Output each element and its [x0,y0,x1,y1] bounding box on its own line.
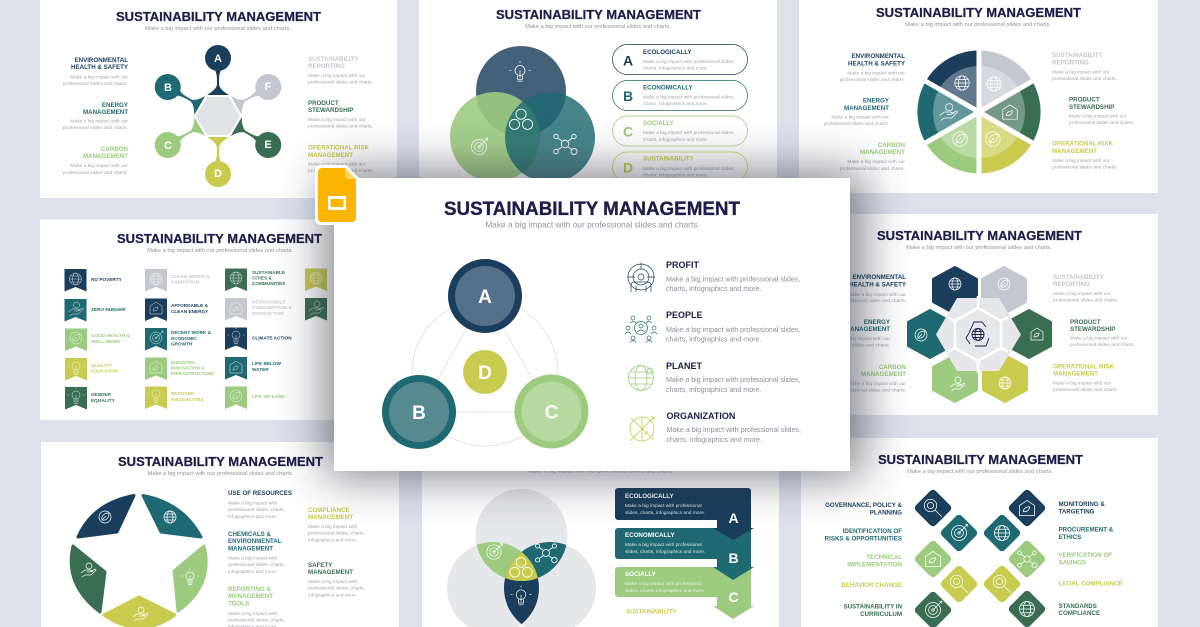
left labels: Make a big impact with our [847,159,905,165]
right labels: MANAGEMENT [1053,370,1098,378]
panel: star slide [41,442,399,627]
left labels: ENVIRONMENTAL [74,57,128,64]
labels: Make a big impact with [308,524,358,530]
labels: professional slides, charts, [228,507,285,513]
banner labels: CONSUMPTION & [252,305,292,310]
text: profit: Make a big impact with professional slides, [666,276,800,284]
banner labels: PRODUCTION [252,311,284,316]
text: planet: Make a big impact with professional slides, [666,376,800,384]
node A [448,259,522,333]
panel: pie slide [799,0,1158,193]
node C: C [545,402,559,424]
arrow: B [615,528,754,580]
labels: Make a big impact with [228,611,278,617]
subtitle: Make a big impact with our professional slides and charts. [905,22,1051,28]
banner labels: QUALITY [91,363,112,368]
labels [228,490,365,627]
option pills [612,44,748,182]
pill text: Make a big impact with professional slides, [643,130,735,136]
heading: SUSTAINABILITY MANAGEMENT [117,231,322,246]
banner labels: AFFORDABLE & [171,303,209,308]
right labels: VERIFICATION OF [1058,552,1112,559]
left labels: Make a big impact with our [848,292,906,298]
center card shadow [326,172,862,476]
left labels: Make a big impact with our [847,70,905,76]
right labels: OPERATIONAL RISK [1052,140,1113,148]
hub diagram: D [214,168,222,180]
labels: MANAGEMENT [308,569,353,576]
heading: SUSTAINABILITY MANAGEMENT [876,5,1081,20]
banner labels: LIFE BELOW [252,361,281,366]
text: organization: Make a big impact with professional slides, [666,426,801,434]
node D [463,350,507,394]
right labels: STEWARDSHIP [308,107,353,114]
right labels: STEWARDSHIP [1069,104,1114,111]
arrow text: ECOLOGICALLY [625,493,674,500]
left labels: professional slides and charts. [63,170,128,176]
labels: MANAGEMENT [228,546,273,552]
banner labels: DECENT WORK & [171,330,212,335]
right labels: SAVINGS [1058,560,1086,566]
right labels: Make a big impact with our [1069,114,1127,120]
arrow text: slides, charts, infographics and more. [625,549,705,555]
right labels: OPERATIONAL RISK [308,144,369,152]
right labels: MONITORING & [1058,501,1105,508]
arrow text: B [728,550,739,566]
pill text: SUSTAINABILITY [643,156,695,162]
icon: profit target [627,263,655,292]
panel: goals banners slide [40,220,400,420]
right labels: Make a big impact with our [308,117,366,123]
text: planet: charts, infographics and more. [666,386,761,394]
left labels: Make a big impact with our [70,74,128,80]
banner labels: EQUALITY [91,398,116,403]
banner labels: ZERO HUNGER [91,307,126,312]
right labels: PRODUCT [1069,96,1100,104]
right labels: OPERATIONAL RISK [1053,364,1114,370]
pill text: charts, infographics and more. [643,137,708,143]
labels: MANAGEMENT [308,514,353,521]
right labels: COMPLIANCE [1058,610,1100,617]
right labels: Make a big impact with our [1053,291,1111,297]
right labels [1052,52,1134,170]
text: planet: PLANET [666,361,703,371]
labels: COMPLIANCE [308,507,350,514]
node D: D [478,363,492,384]
subtitle: Make a big impact with our professional slides and charts. [485,220,700,230]
banner labels: EDUCATION [91,368,119,374]
left labels: CARBON [878,142,906,149]
right labels: MANAGEMENT [1052,148,1097,155]
banner labels: LIFE ON LAND [252,394,285,399]
right labels: REPORTING [1053,281,1090,288]
banner labels: SANITATION [171,280,200,284]
text: organization: charts, infographics and more. [666,436,762,444]
labels: Make a big impact with [308,579,358,585]
left labels: TECHNICAL [866,554,902,561]
right labels: professional slides and charts. [1053,387,1118,393]
left labels: MANAGEMENT [83,153,128,160]
heading: SUSTAINABILITY MANAGEMENT [116,9,321,24]
text: organization: ORGANIZATION [666,411,735,421]
right labels: LEGAL COMPLIANCE [1058,580,1123,588]
left labels: ENVIRONMENTAL [851,53,905,60]
left labels: HEALTH & SAFETY [71,64,129,71]
left labels: IDENTIFICATION OF [843,528,902,535]
right labels: professional slides and charts. [308,168,373,174]
subtitle: Make a big impact with our professional slides and charts. [525,24,671,30]
left labels: ENERGY [864,319,891,326]
left labels: MANAGEMENT [860,149,905,156]
left labels: professional slides and charts. [63,125,128,131]
labels: TOOLS [228,600,249,608]
banner labels: INEQUALITIES [171,397,204,402]
right labels: Make a big impact with our [1052,158,1110,164]
banner labels: CLEAN ENERGY [171,309,209,314]
banner labels: NO POVERTY [91,277,123,282]
arrow text: Make a big impact with professional [625,542,702,548]
pill text: Make a big impact with professional slides, [643,166,735,172]
right labels [1058,501,1123,617]
pill text: C [623,124,633,140]
star segments [71,496,206,627]
right labels: STEWARDSHIP [1070,326,1115,333]
right labels [308,56,373,174]
labels: ENVIRONMENTAL [228,538,282,545]
banner labels: INFRASTRUCTURE [171,371,214,376]
triangle diagram [382,259,588,449]
arrow text: C [728,589,739,605]
panel: hexagon slide [800,214,1158,415]
banner labels: SUSTAINABLE [252,270,285,275]
labels: infographics and more. [228,514,277,520]
arrow text: ECONOMICALLY [625,532,675,539]
right labels: SUSTAINABILITY [1052,52,1104,59]
left labels: MANAGEMENT [83,109,128,116]
banner labels: GROWTH [171,342,193,346]
text: profit: PROFIT [666,260,700,270]
pill text: A [623,52,633,68]
left labels: Make a big impact with our [70,163,128,169]
venn intersections [447,489,596,627]
text: people: Make a big impact with professional slides, [666,326,800,334]
arrow text: slides, charts, infographics and more. [625,588,705,594]
left labels: MANAGEMENT [861,371,906,378]
arrow text: SOCIALLY [625,571,657,578]
pill text: charts, infographics and more. [643,101,708,107]
labels: professional slides, charts, [308,586,365,592]
icon: organization compass [630,417,654,441]
left labels: MANAGEMENT [844,105,889,112]
left labels: CARBON [879,364,907,371]
text: organization [666,411,801,444]
left labels: Make a big impact with our [848,381,906,387]
banner labels: CITIES & [252,276,272,280]
pill text: ECONOMICALLY [643,84,693,92]
right labels: professional slides and charts. [308,124,373,130]
node B: B [412,403,426,424]
icon: google slides [315,165,359,225]
pill text: SOCIALLY [643,120,675,127]
pill text: Make a big impact with professional slides, [643,59,735,65]
right labels: professional slides and charts. [1069,120,1134,126]
hub diagram: E [264,139,272,151]
labels: professional slides, charts, [228,618,285,624]
labels: SAFETY [308,562,333,569]
right labels: PROCUREMENT & [1058,526,1114,534]
pill text: charts, infographics and more. [643,66,708,72]
left labels: professional slides and charts. [840,77,905,83]
labels: CHEMICALS & [228,531,271,538]
left labels: BEHAVIOR CHANGE [841,582,902,589]
right labels: STANDARDS [1058,603,1097,610]
left labels: HEALTH & SAFETY [848,60,906,68]
left labels: RISKS & OPPORTUNITIES [825,536,902,542]
right labels: SUSTAINABILITY [308,56,360,63]
subtitle: Make a big impact with our professional slides and charts. [906,245,1052,251]
banner labels: COMMUNITIES [252,281,285,286]
right labels: professional slides and charts. [1053,298,1118,304]
arrow text: A [728,510,739,526]
left labels [825,502,903,618]
text: profit: charts, infographics and more. [666,285,761,293]
hub diagram: A [214,53,222,65]
text: people: PEOPLE [666,310,703,320]
hexagon diagram [908,267,1051,402]
hub diagram: B [164,82,172,94]
panel: venn slide [419,0,777,198]
left labels: CARBON [101,146,129,153]
text: people [666,310,800,344]
right labels: Make a big impact with our [1070,336,1128,342]
banner labels: RESPONSIBLE [252,300,286,304]
left labels: professional slides and charts. [840,166,905,172]
arrow: C [615,567,754,619]
text: people: charts, infographics and more. [666,336,761,344]
banner labels: CLIMATE ACTION [252,336,292,340]
pill text: D [623,160,633,176]
right labels: Make a big impact with our [308,73,366,79]
hub diagram: C [164,140,172,152]
subtitle: Make a big impact with our professional slides and charts. [147,248,293,254]
left labels: professional slides and charts. [824,121,889,127]
left labels: ENVIRONMENTAL [852,274,906,281]
labels: USE OF RESOURCES [228,490,292,497]
banner labels: WELL-BEING [91,339,121,344]
arrow text: Make a big impact with professional [625,503,702,509]
arrow text: SUSTAINABILITY [626,608,678,616]
heading: SUSTAINABILITY MANAGEMENT [444,199,740,220]
heading: SUSTAINABILITY MANAGEMENT [877,228,1082,243]
banner labels: GENDER [91,392,112,397]
banner labels: WATER [252,367,269,372]
banner labels: REDUCED [171,391,195,396]
left labels: CURRICULUM [860,611,902,618]
right labels: PRODUCT [1070,319,1101,326]
labels: REPORTING & [228,586,272,593]
icon: planet globe [628,366,654,390]
heading: SUSTAINABILITY MANAGEMENT [496,7,701,22]
banner labels [91,270,292,403]
pill text: B [623,88,633,104]
right labels [1053,274,1135,393]
banners [64,268,327,410]
right labels: Make a big impact with our [1052,70,1110,76]
left labels: Make a big impact with our [70,118,128,124]
subtitle: Make a big impact with our professional slides and charts. [528,468,674,474]
left labels [63,57,129,176]
venn diagram [450,46,595,182]
arrow text: slides, charts, infographics and more. [625,510,705,516]
left labels: IMPLEMENTATION [847,562,903,568]
left labels: Make a big impact with our [832,336,890,342]
banner labels: CLEAN WATER & [171,274,210,279]
heading: SUSTAINABILITY MANAGEMENT [118,454,323,469]
heading: SUSTAINABILITY MANAGEMENT [878,452,1083,467]
left labels: GOVERNANCE, POLICY & [825,502,903,509]
right labels: professional slides and charts. [308,80,373,86]
node B [382,375,456,449]
right labels: MANAGEMENT [308,152,353,159]
left labels: ENERGY [102,102,129,109]
labels: infographics and more. [308,592,357,598]
right labels: ETHICS [1058,534,1081,541]
left labels [824,53,906,172]
right labels: Make a big impact with our [308,162,366,168]
diamonds [913,488,1047,627]
left labels: PLANNING [870,510,902,516]
pill text: Make a big impact with professional slides, [643,94,735,100]
arrow text [625,493,739,616]
right labels: REPORTING [308,63,345,70]
right labels: TARGETING [1058,508,1095,516]
panel: venn arrows slide [422,471,779,627]
right labels: professional slides and charts. [1070,342,1135,348]
panel: diamonds slide [801,438,1158,627]
subtitle: Make a big impact with our professional slides and charts. [145,26,291,32]
labels: infographics and more. [308,538,357,544]
icon: people network [625,316,657,342]
left labels: HEALTH & SAFETY [849,282,907,288]
subtitle: Make a big impact with our professional slides and charts. [907,469,1053,475]
left labels [825,274,907,394]
right labels: PRODUCT [308,100,339,107]
left labels: ENERGY [863,98,890,104]
labels: Make a big impact with [228,500,278,506]
left labels: professional slides and charts. [841,388,906,394]
labels: infographics and more. [228,569,277,575]
pill text: charts, infographics and more. [643,172,708,178]
banner labels: ECONOMIC [171,336,197,341]
right labels: REPORTING [1052,60,1089,66]
panel: main slide [334,178,850,471]
hub diagram [150,45,286,187]
panel: hub and spoke slide [40,0,397,198]
labels: MANAGEMENT [228,593,273,600]
left labels: MANAGEMENT [845,326,890,333]
text: profit [666,260,800,293]
pie chart [917,46,1041,178]
arrow text: Make a big impact with professional [625,581,702,587]
labels: professional slides, charts, [308,530,365,536]
left labels: Make a big impact with our [831,114,889,120]
node C [514,374,588,448]
right labels: professional slides and charts. [1052,76,1117,82]
left labels: professional slides and charts. [825,342,890,348]
text: planet [666,361,800,394]
banner labels: INDUSTRY, [171,360,196,365]
labels: Make a big impact with [228,556,278,562]
banner labels: GOOD HEALTH & [91,333,131,338]
subtitle: Make a big impact with our professional slides and charts. [148,471,294,477]
right labels: Make a big impact with our [1053,380,1111,386]
arrow: A [615,488,754,540]
pill text [623,49,735,178]
pill text: ECOLOGICALLY [643,49,692,56]
right labels: SUSTAINABILITY [1053,274,1105,281]
left labels: SUSTAINABILITY IN [843,604,903,610]
banner labels: INNOVATION & [171,366,205,370]
right labels: professional slides and charts. [1052,164,1117,170]
left labels: professional slides and charts. [63,81,128,87]
hub diagram: F [265,81,272,93]
node A: A [478,287,492,308]
labels: professional slides, charts, [228,562,285,568]
left labels: professional slides and charts. [841,298,906,304]
